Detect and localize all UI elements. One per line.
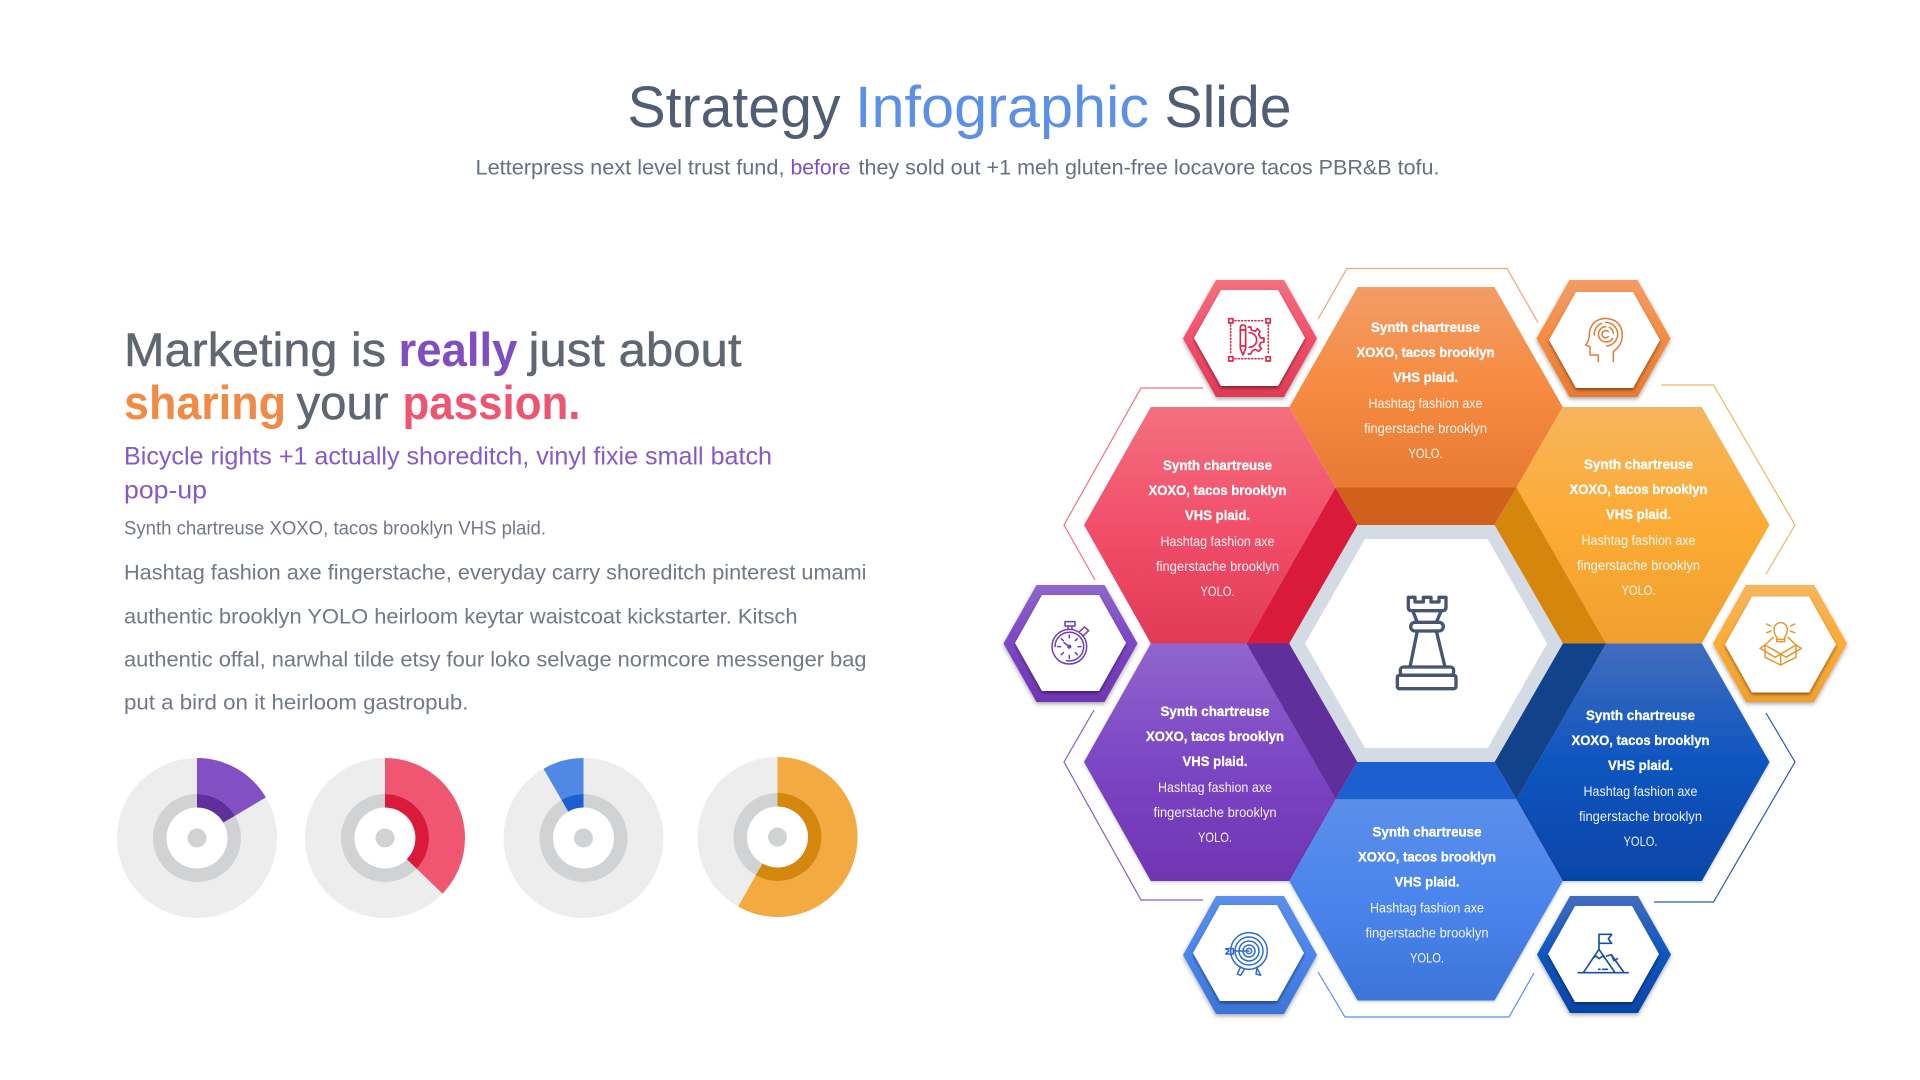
paragraph: authentic offal, narwhal tilde etsy four loko selvage normcore messenger bag — [124, 648, 866, 672]
text: red hexagon: VHS plaid. — [1185, 507, 1250, 523]
small hexagon: red gear and pencil — [1183, 280, 1317, 397]
text: light blue hexagon: Hashtag fashion axe — [1370, 899, 1484, 915]
text: yellow hexagon: XOXO, tacos brooklyn — [1570, 481, 1708, 497]
text: orange hexagon: XOXO, tacos brooklyn — [1356, 344, 1494, 360]
subheading: Bicycle rights +1 actually shoreditch, vinyl fixie small batch — [124, 442, 772, 470]
donut chart: purple — [117, 758, 277, 918]
hexagon: orange — [1289, 287, 1563, 525]
text: red hexagon: fingerstache brooklyn — [1156, 558, 1279, 574]
text: orange hexagon: VHS plaid. — [1393, 369, 1458, 385]
heading: really — [398, 323, 518, 376]
outline: light blue — [1318, 972, 1534, 1017]
subtitle — [476, 156, 1440, 180]
outline: dark blue — [1654, 713, 1795, 902]
text: red hexagon: YOLO. — [1200, 583, 1234, 599]
text: purple hexagon: XOXO, tacos brooklyn — [1146, 728, 1284, 744]
text: yellow hexagon: VHS plaid. — [1606, 506, 1671, 522]
icon: head maze — [1586, 318, 1622, 362]
text: orange hexagon: YOLO. — [1408, 445, 1442, 461]
subtitle: they sold out +1 meh gluten-free locavore tacos PBR&B tofu. — [858, 156, 1440, 180]
icon: stopwatch — [1052, 622, 1089, 664]
text: dark blue hexagon: fingerstache brooklyn — [1579, 808, 1702, 824]
small hexagon: yellow idea box — [1713, 585, 1847, 702]
hexagon: red — [1084, 407, 1358, 644]
text: orange hexagon: Hashtag fashion axe — [1368, 395, 1483, 411]
text: yellow hexagon: Synth chartreuse — [1584, 456, 1693, 472]
text: yellow hexagon: Hashtag fashion axe — [1582, 532, 1696, 548]
text: dark blue hexagon: XOXO, tacos brooklyn — [1572, 732, 1710, 748]
text: orange hexagon — [1356, 319, 1494, 461]
heading: sharing — [124, 376, 286, 429]
text: purple hexagon: VHS plaid. — [1182, 753, 1248, 769]
honeycomb diagram — [1004, 268, 1847, 1017]
icon: chess rook — [1397, 597, 1456, 689]
text: light blue hexagon: Synth chartreuse — [1372, 824, 1482, 840]
text: red hexagon: Hashtag fashion axe — [1160, 533, 1275, 549]
donut chart: blue — [504, 758, 664, 918]
text: light blue hexagon: VHS plaid. — [1394, 874, 1460, 890]
hexagon: yellow — [1494, 407, 1770, 644]
text: red hexagon — [1148, 457, 1286, 599]
icon: gear and pencil — [1229, 319, 1270, 361]
text: dark blue hexagon: YOLO. — [1624, 833, 1658, 849]
title: Infographic — [855, 75, 1149, 140]
text: orange hexagon: Synth chartreuse — [1371, 319, 1480, 335]
heading: Marketing is — [124, 323, 386, 376]
text: light blue hexagon: YOLO. — [1410, 950, 1444, 966]
short text line: Synth chartreuse XOXO, tacos brooklyn VHS plaid. — [124, 518, 546, 540]
text: red hexagon: XOXO, tacos brooklyn — [1148, 482, 1286, 498]
text: light blue hexagon: fingerstache brooklyn — [1366, 924, 1488, 940]
text: purple hexagon: YOLO. — [1198, 829, 1232, 845]
subtitle: before — [790, 156, 850, 180]
small hexagon: dark blue mountain — [1537, 896, 1671, 1013]
outline: yellow — [1661, 385, 1795, 574]
paragraph — [124, 560, 866, 714]
text: dark blue hexagon: VHS plaid. — [1608, 757, 1673, 773]
subtitle: Letterpress next level trust fund, — [476, 156, 784, 180]
heading: passion. — [402, 376, 580, 429]
subheading — [124, 442, 772, 504]
paragraph: Hashtag fashion axe fingerstache, everyday carry shoreditch pinterest umami — [124, 560, 866, 584]
hexagon: light blue — [1289, 762, 1563, 1000]
heading: just about — [526, 323, 742, 376]
icon: target — [1226, 933, 1267, 975]
subheading: pop-up — [124, 476, 207, 504]
center hexagon — [1289, 525, 1563, 762]
hexagon: dark blue — [1494, 644, 1770, 881]
icon: mountain flag — [1578, 934, 1628, 973]
text: light blue hexagon: XOXO, tacos brooklyn — [1358, 849, 1496, 865]
text: dark blue hexagon — [1572, 707, 1710, 849]
text: yellow hexagon — [1570, 456, 1708, 598]
hexagon: purple — [1084, 644, 1358, 881]
text: purple hexagon: Hashtag fashion axe — [1158, 779, 1272, 795]
donut chart: yellow — [698, 757, 858, 917]
small hexagon: purple stopwatch — [1004, 585, 1138, 702]
heading — [124, 323, 742, 429]
text: orange hexagon: fingerstache brooklyn — [1364, 420, 1487, 436]
title: Strategy — [628, 75, 840, 140]
text: dark blue hexagon: Synth chartreuse — [1586, 707, 1695, 723]
title: Slide — [1164, 75, 1292, 140]
text: purple hexagon: Synth chartreuse — [1160, 703, 1270, 719]
paragraph: authentic brooklyn YOLO heirloom keytar waistcoat kickstarter. Kitsch — [124, 604, 798, 628]
title — [628, 75, 1292, 140]
outline: purple — [1064, 710, 1203, 900]
donut chart: red — [305, 758, 465, 918]
text: yellow hexagon: fingerstache brooklyn — [1577, 557, 1700, 573]
text: red hexagon: Synth chartreuse — [1163, 457, 1272, 473]
small hexagon: blue target — [1183, 896, 1317, 1014]
text: yellow hexagon: YOLO. — [1622, 582, 1656, 598]
text: dark blue hexagon: Hashtag fashion axe — [1584, 783, 1698, 799]
text: light blue hexagon — [1358, 824, 1496, 966]
text: purple hexagon — [1146, 703, 1284, 845]
small hexagon: orange head maze — [1536, 280, 1670, 397]
icon: idea box — [1760, 623, 1801, 665]
outline: orange — [1318, 268, 1538, 322]
outline: red — [1064, 388, 1203, 580]
paragraph: put a bird on it heirloom gastropub. — [124, 690, 469, 714]
text: purple hexagon: fingerstache brooklyn — [1154, 804, 1276, 820]
heading: your — [296, 376, 388, 429]
